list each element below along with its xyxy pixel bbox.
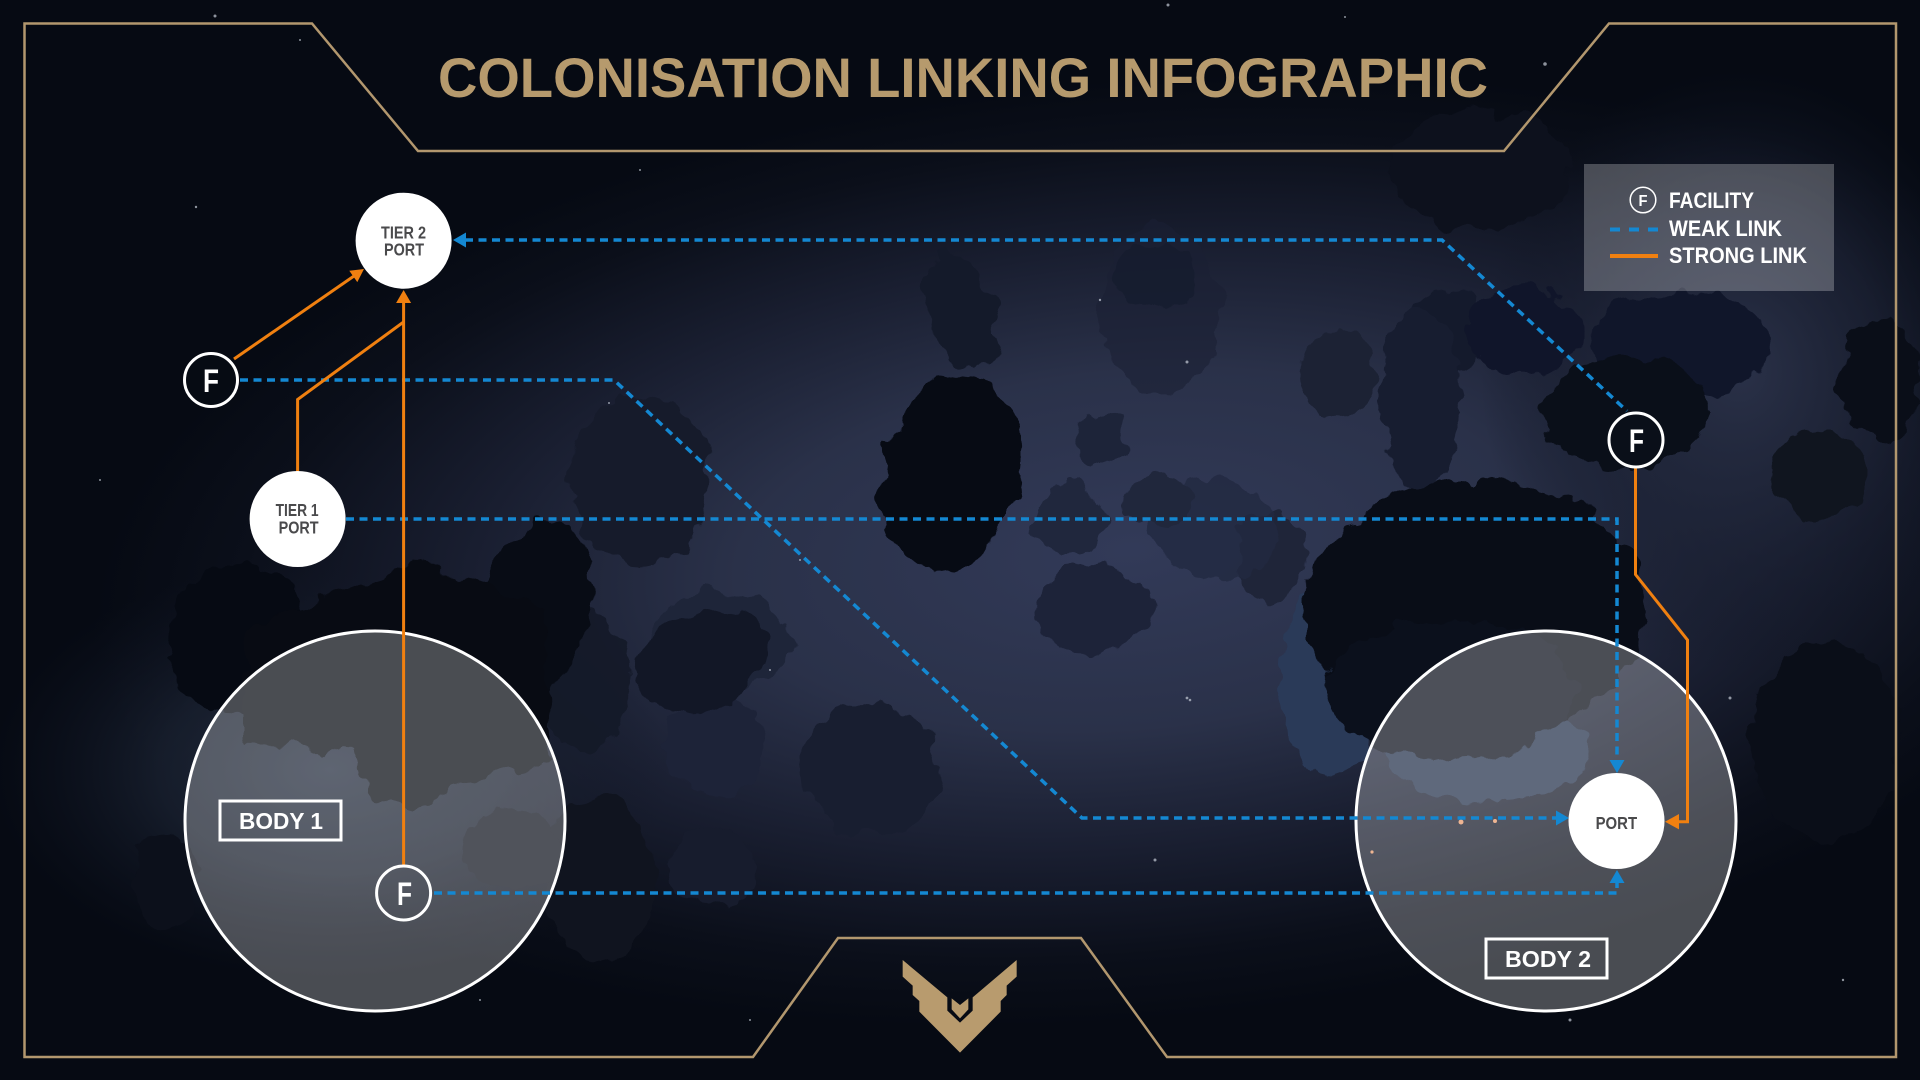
body 2 port — [1568, 773, 1664, 869]
legend text: STRONG LINK — [1669, 243, 1807, 268]
tier 1 port: PORT — [279, 518, 319, 538]
tier 2 port: PORT — [384, 240, 424, 260]
legend icon: facility — [1630, 187, 1656, 213]
asteroids — [133, 110, 1920, 965]
strong link arrowheads — [349, 269, 1679, 829]
facility: right asteroid: F — [1629, 423, 1644, 459]
tier 1 port: TIER 1 — [276, 500, 319, 520]
weak link arrowheads — [453, 232, 1624, 883]
tier 1 port — [250, 471, 346, 567]
facility: upper left: F — [203, 363, 219, 399]
body 1 label: BODY 1 — [239, 808, 323, 834]
body 1 label — [220, 801, 341, 840]
panel: body 2 — [1356, 631, 1736, 1011]
legend text: FACILITY — [1669, 188, 1754, 213]
distant orange stars — [1370, 819, 1497, 854]
legend icon: facility: F — [1638, 193, 1648, 210]
facility: body 1 — [377, 866, 431, 920]
tier 2 port — [356, 193, 452, 289]
legend text — [1669, 188, 1807, 268]
facility: right asteroid — [1609, 413, 1663, 467]
body 2 label: BODY 2 — [1505, 946, 1591, 972]
tier 2 port: TIER 2 — [381, 222, 426, 242]
icon: elite emblem — [903, 960, 1017, 1053]
body 2 label — [1486, 939, 1607, 978]
legend icon: strong link — [1610, 254, 1658, 258]
weak links — [240, 240, 1627, 893]
body 2 port: PORT — [1596, 813, 1637, 833]
legend text: WEAK LINK — [1669, 216, 1782, 241]
facility: upper left — [184, 354, 238, 406]
strong links — [234, 276, 1688, 866]
panel: body 1 — [185, 631, 565, 1011]
title: COLONISATION LINKING INFOGRAPHIC — [438, 46, 1488, 109]
facility: body 1: F — [397, 876, 412, 912]
legend icon: weak link — [1610, 228, 1658, 232]
legend — [1584, 164, 1834, 291]
